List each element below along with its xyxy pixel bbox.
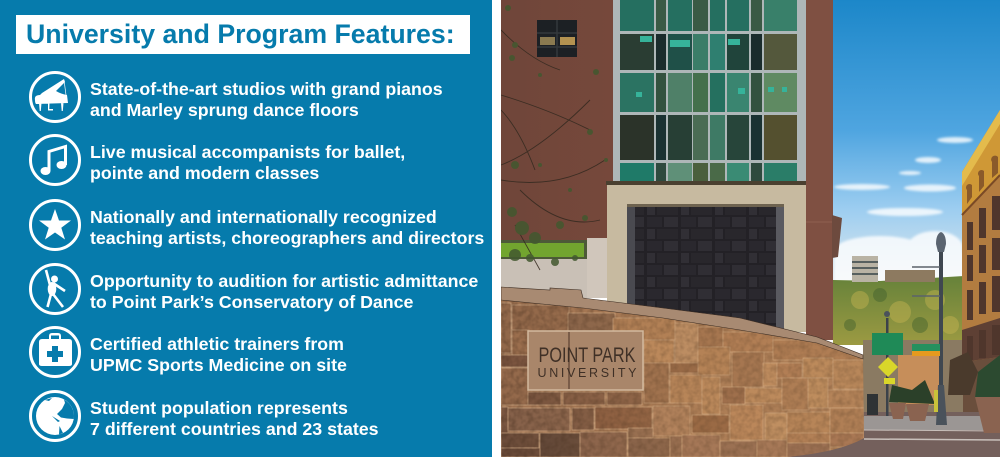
photo: Point Park University entrance xyxy=(501,0,1000,457)
street lamps, signs and planters xyxy=(867,232,1000,433)
text: UPMC Sports Medicine on site xyxy=(90,355,347,375)
text: 7 different countries and 23 states xyxy=(90,419,379,439)
feature: student population xyxy=(29,390,379,442)
text xyxy=(90,207,484,248)
wall plaque: POINT PARK xyxy=(538,344,636,367)
icon: dancer xyxy=(29,263,81,315)
wall plaque: UNIVERSITY xyxy=(538,366,637,380)
right building xyxy=(962,110,1000,362)
icon: grand piano xyxy=(29,71,81,123)
text: pointe and modern classes xyxy=(90,163,319,183)
text: teaching artists, choreographers and directors xyxy=(90,228,484,248)
stone retaining wall xyxy=(501,287,866,457)
icon: music notes xyxy=(29,134,81,186)
text xyxy=(90,271,478,312)
lower light wall and green band xyxy=(501,238,607,298)
feature: athletic trainers xyxy=(29,326,347,378)
feature: teaching artists xyxy=(29,199,484,251)
dark stone water wall xyxy=(627,206,784,330)
text xyxy=(90,398,379,439)
small window xyxy=(537,20,577,57)
icon: star xyxy=(29,199,81,251)
text: Live musical accompanists for ballet, xyxy=(90,142,405,162)
feature: studios xyxy=(29,71,443,123)
feature: audition xyxy=(29,263,478,315)
tree xyxy=(501,5,608,270)
text: Certified athletic trainers from xyxy=(90,334,344,354)
icon: globe xyxy=(29,390,81,442)
sky xyxy=(833,0,1000,290)
wall cap xyxy=(501,287,863,359)
brick wall left xyxy=(501,0,613,245)
text xyxy=(90,142,405,183)
brick tower right xyxy=(806,0,842,340)
glass curtain wall xyxy=(613,0,806,183)
text xyxy=(90,334,347,375)
text: Nationally and internationally recognized xyxy=(90,207,437,227)
text xyxy=(90,79,443,120)
icon: first aid kit xyxy=(29,326,81,378)
wall plaque xyxy=(528,331,643,390)
text: to Point Park’s Conservatory of Dance xyxy=(90,292,413,312)
text: Opportunity to audition for artistic admittance xyxy=(90,271,478,291)
hillside xyxy=(833,256,964,345)
street and pavement xyxy=(787,340,1000,457)
feature: accompanists xyxy=(29,134,405,186)
concrete entrance frame xyxy=(606,181,806,332)
text: Student population represents xyxy=(90,398,348,418)
panel: university and program features xyxy=(0,0,492,457)
text: State-of-the-art studios with grand pianos xyxy=(90,79,443,99)
text: and Marley sprung dance floors xyxy=(90,100,359,120)
heading: University and Program Features: xyxy=(26,19,455,49)
